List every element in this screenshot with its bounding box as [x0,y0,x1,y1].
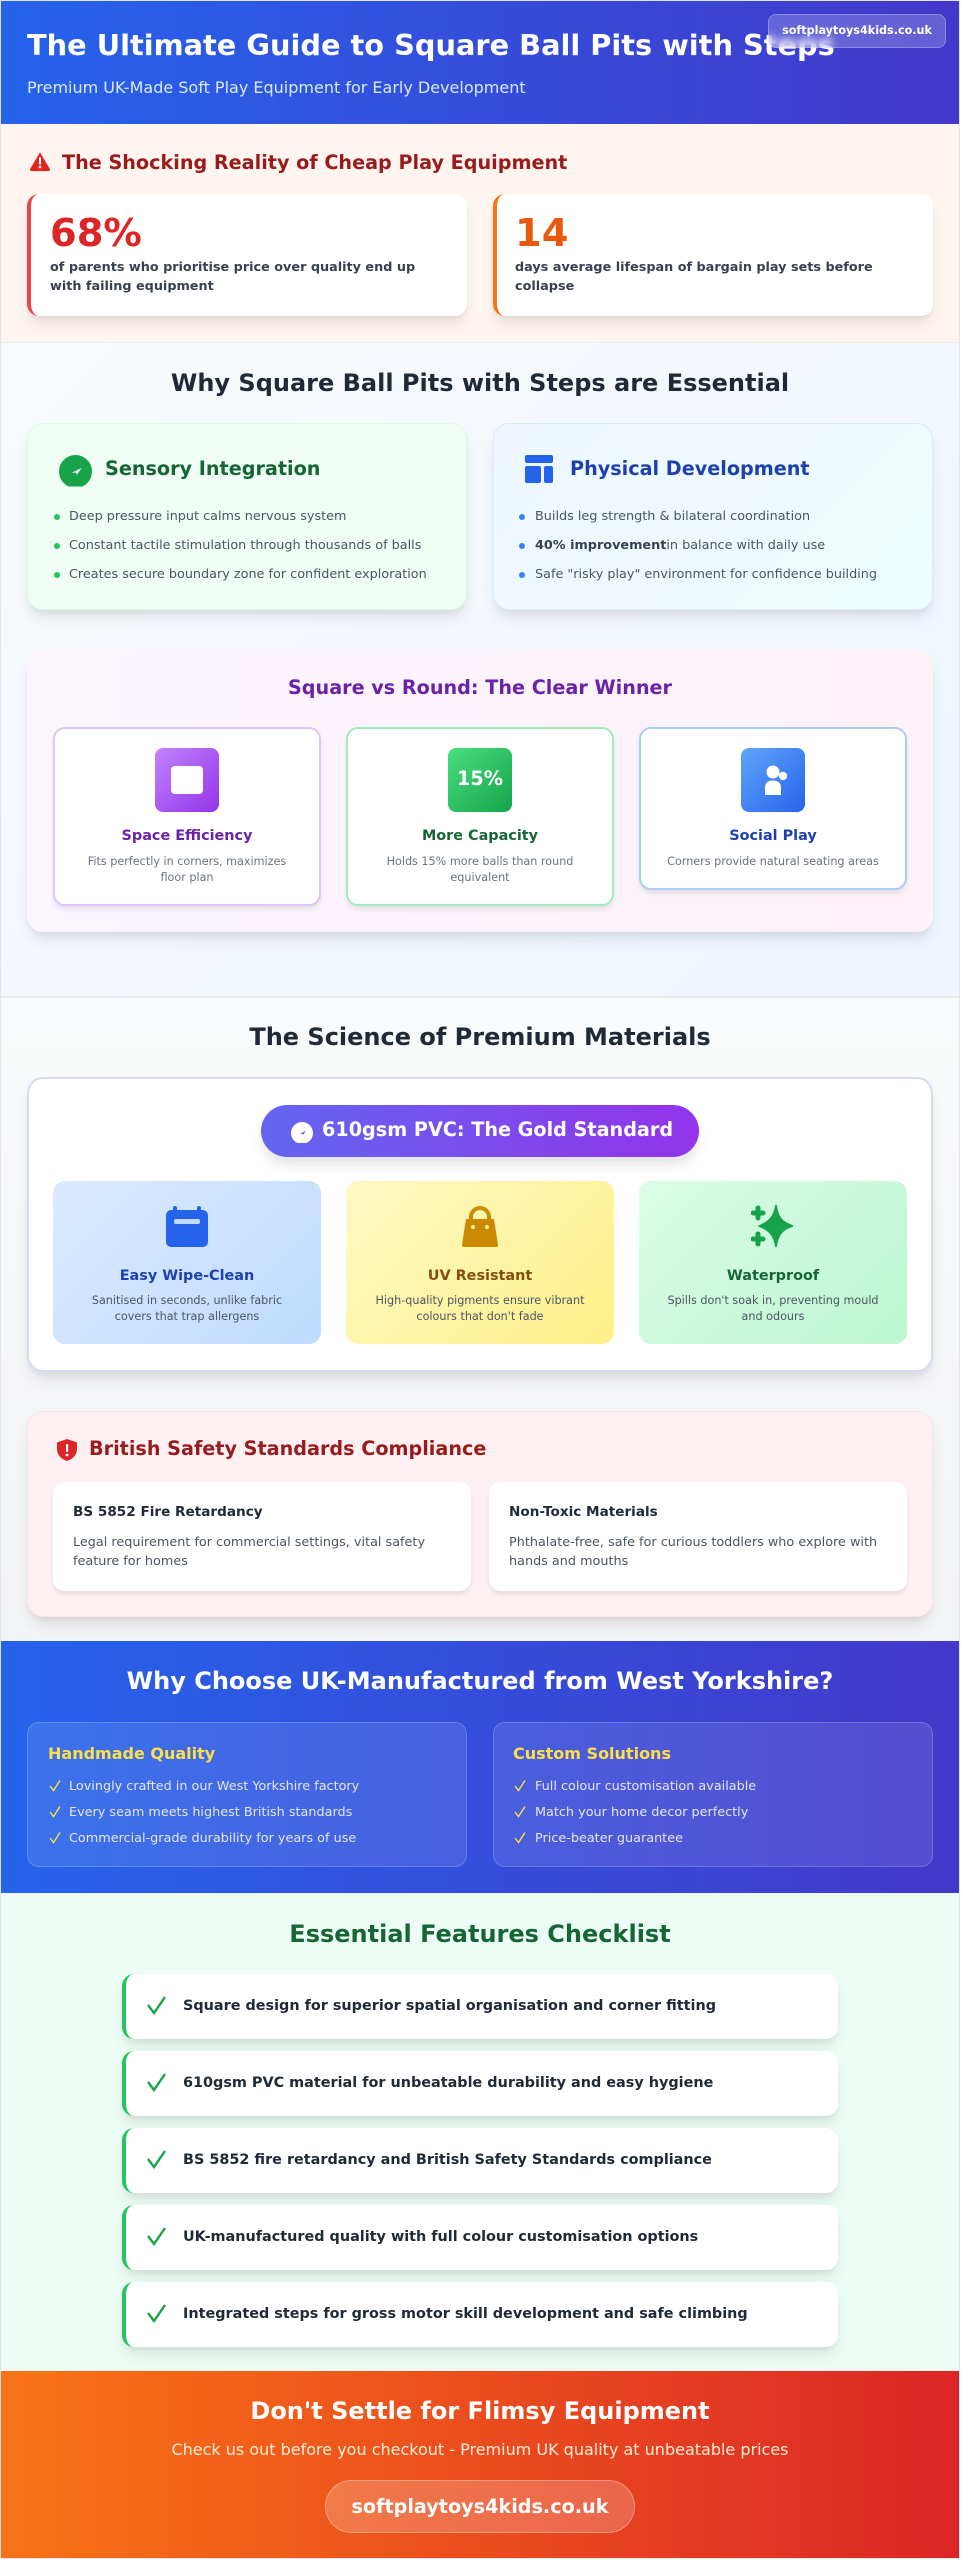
stat description: collapse [515,279,574,294]
card text: floor plan [160,871,214,884]
card text: equivalent [450,871,510,884]
card title: More Capacity [422,828,538,844]
call to action [1,2371,959,2558]
panel: shocking reality [1,124,959,343]
heading: Square vs Round: The Clear Winner [288,676,672,699]
heading: Essential Features Checklist [289,1920,671,1948]
website button: softplaytoys4kids.co.uk [352,2495,608,2518]
check list: Lovingly crafted in our West Yorkshire factory [69,1779,359,1794]
header banner [1,1,959,124]
card text: Spills don't soak in, preventing mould [667,1294,879,1307]
website button [325,2480,635,2533]
card text: and odours [742,1310,804,1323]
card title: Non-Toxic Materials [509,1504,658,1520]
heading: Don't Settle for Flimsy Equipment [250,2397,710,2425]
website badge: softplaytoys4kids.co.uk [782,24,932,37]
card text [73,1535,425,1569]
card text: covers that trap allergens [115,1310,259,1323]
card: more capacity [346,727,614,906]
heading: The Shocking Reality of Cheap Play Equipment [62,151,567,174]
icon: check [147,2150,166,2169]
stat description [515,260,873,294]
panel: sensory integration [27,423,467,610]
icon: dashboard [525,455,553,483]
bullet list: 40% improvementin balance with daily use [535,538,825,553]
card: non-toxic [489,1482,907,1591]
bullet list: Builds leg strength & bilateral coordination [535,509,810,524]
card text [92,1294,282,1323]
card title: Handmade Quality [48,1744,215,1763]
heading: British Safety Standards Compliance [89,1437,486,1460]
check list: Every seam meets highest British standards [69,1805,352,1820]
bullet list: Creates secure boundary zone for confident exploration [69,567,427,582]
bullet list [54,509,427,582]
checklist item 5 [122,2282,838,2347]
stat description: of parents who prioritise price over quality end up [50,260,415,275]
icon: sparkle [751,1205,793,1247]
card text: Holds 15% more balls than round [387,855,573,868]
icon: people [741,748,805,812]
checklist item 3 [122,2128,838,2193]
section: features checklist [1,1893,959,2371]
heading: Why Square Ball Pits with Steps are Essential [171,369,789,397]
icon: sensory badge [59,455,92,486]
panel: handmade quality [27,1722,467,1867]
card text: hands and mouths [509,1554,628,1569]
icon: square [155,748,219,812]
card title: BS 5852 Fire Retardancy [73,1504,263,1520]
pill text: 610gsm PVC: The Gold Standard [322,1118,673,1141]
section: premium materials [1,998,959,1641]
card text [667,1294,879,1323]
checklist item 4 [122,2205,838,2270]
icon: check [147,2227,166,2246]
card: social play [639,727,907,890]
bullet list [519,509,877,582]
icon: 15 percent [448,748,512,812]
card text [88,855,286,884]
heading: Why Choose UK-Manufactured from West Yorkshire? [127,1667,833,1695]
pill heading [261,1105,699,1157]
bullet list: Constant tactile stimulation through thousands of balls [69,538,421,553]
card: BS 5852 [53,1482,471,1591]
section: why essential [1,343,959,998]
icon: check [147,1996,166,2015]
card text: colours that don't fade [416,1310,544,1323]
check list [514,1779,756,1846]
bullet list: Deep pressure input calms nervous system [69,509,347,524]
checklist item 2 [122,2051,838,2116]
icon: 15 percent: 15% [457,767,503,790]
subheading: Check us out before you checkout - Premium UK quality at unbeatable prices [171,2440,789,2459]
panel: physical development [493,423,933,610]
card title: Space Efficiency [122,828,252,844]
stat description: days average lifespan of bargain play sets before [515,260,873,275]
check list [50,1779,359,1846]
item text: 610gsm PVC material for unbeatable durability and easy hygiene [183,2075,713,2091]
website badge [768,14,946,48]
check list: Price-beater guarantee [535,1831,683,1846]
card text [376,1294,584,1323]
icon: calendar [166,1206,208,1247]
panel: custom solutions [493,1722,933,1867]
card text: Phthalate-free, safe for curious toddlers who explore with [509,1535,877,1550]
card: space efficiency [53,727,321,906]
subtitle: Premium UK-Made Soft Play Equipment for Early Development [27,78,526,97]
icon: badge [291,1122,313,1143]
stat card: 14 days [493,194,933,316]
bullet list: Safe "risky play" environment for confidence building [535,567,877,582]
stat description: with failing equipment [50,279,214,294]
card text [387,855,573,884]
card text: Fits perfectly in corners, maximizes [88,855,286,868]
icon: check [147,2073,166,2092]
card: waterproof [639,1181,907,1344]
card title: Waterproof [727,1268,819,1284]
icon: bag [462,1206,498,1247]
item text: Square design for superior spatial organisation and corner fitting [183,1998,716,2014]
card title: Social Play [729,828,817,844]
icon: warning triangle [30,152,50,172]
card text: Corners provide natural seating areas [667,855,879,868]
panel: British safety standards [27,1411,933,1617]
stat description [50,260,415,294]
card text [509,1535,877,1569]
item text: Integrated steps for gross motor skill development and safe climbing [183,2306,748,2322]
checklist item 1 [122,1974,838,2039]
card title: UV Resistant [428,1268,532,1284]
stat number: 68% [50,211,142,256]
stat card: 68% [27,194,467,316]
heading: The Science of Premium Materials [249,1023,711,1051]
card title: Sensory Integration [105,457,320,480]
card text: feature for homes [73,1554,188,1569]
card title: Custom Solutions [513,1744,671,1763]
card title: Physical Development [570,457,810,480]
item text: BS 5852 fire retardancy and British Safety Standards compliance [183,2152,712,2168]
card text: High-quality pigments ensure vibrant [376,1294,584,1307]
card title: Easy Wipe-Clean [120,1268,254,1284]
panel: 610gsm PVC [27,1077,933,1372]
card: easy wipe-clean [53,1181,321,1344]
icon: check [147,2304,166,2323]
stat number: 14 [515,211,568,256]
check list: Commercial-grade durability for years of use [69,1831,356,1846]
item text: UK-manufactured quality with full colour customisation options [183,2229,698,2245]
card text: Legal requirement for commercial settings, vital safety [73,1535,425,1550]
panel: square vs round [27,649,933,932]
icon: shield [57,1439,77,1461]
check list: Match your home decor perfectly [535,1805,748,1820]
card text: Sanitised in seconds, unlike fabric [92,1294,282,1307]
check list: Full colour customisation available [535,1779,756,1794]
card: UV resistant [346,1181,614,1344]
title: The Ultimate Guide to Square Ball Pits with Steps [27,28,835,62]
section: UK manufactured [1,1641,959,1893]
